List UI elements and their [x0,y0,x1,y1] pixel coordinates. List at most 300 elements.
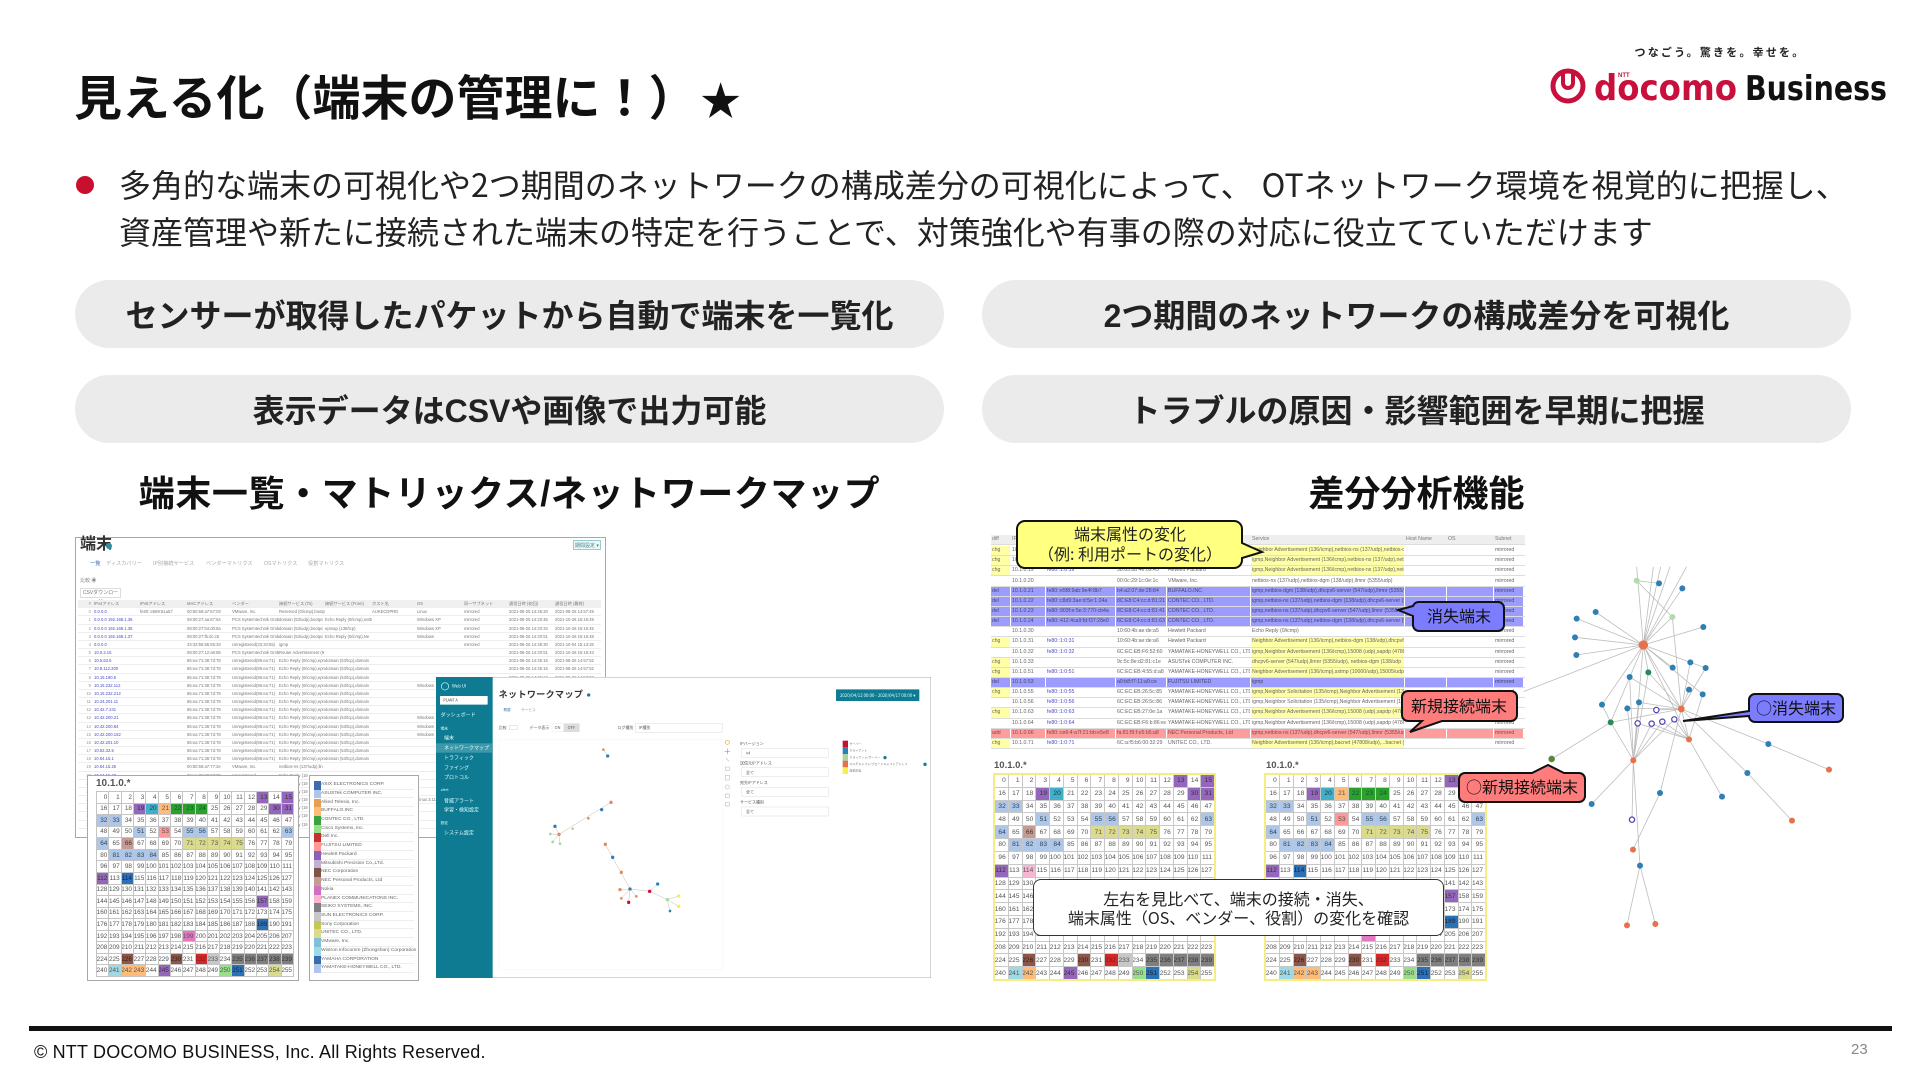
table: diff results: Host Name [1406,536,1432,542]
panel: device list screenshot: # [89,601,91,606]
chart: diff matrix before: 144 [995,893,1006,900]
chart: diff matrix before: 114 [1023,867,1033,874]
panel: vendor legend: ASUSTek COMPUTER INC. [321,791,382,796]
chart: diff matrix after: 212 [1321,944,1332,951]
map filter selects: 全て [746,769,754,776]
chart: diff matrix before: 96 [998,854,1006,861]
panel: device list screenshot: 24 [86,805,91,810]
chart: diff matrix before: 107 [1146,854,1157,861]
panel: device list screenshot: 7 [89,666,91,671]
chart: diff matrix before: 64 [998,829,1006,836]
chart: diff matrix before: 24 [1108,790,1116,797]
chart: diff matrix after: 165 [1335,906,1346,913]
panel: device list screenshot: 0.0.0.0 192.168.1.36 [94,617,132,622]
chart: IP address matrix: 110 [270,863,280,870]
chart: diff matrix after: 228 [1321,957,1332,964]
panel: vendor legend: UNITEC CO., LTD. [321,930,362,935]
panel: device list screenshot: Echo Reply (19 [279,772,308,778]
table: diff results: 6C:EC:EB:4:55:d:a8 [1117,669,1164,675]
chart: diff matrix after: 52 [1324,816,1332,823]
chart: diff matrix before: 6 [1085,777,1088,784]
chart: diff matrix after: 161 [1280,906,1290,913]
chart: diff matrix after: 0 [1273,777,1277,784]
chart: diff matrix after: 158 [1458,893,1469,900]
chart: diff matrix after: 77 [1448,829,1456,836]
chart: diff matrix after: 34 [1297,803,1304,810]
chart: diff matrix after: 225 [1280,957,1290,964]
panel: device list screenshot: 8 [89,674,91,680]
footer copyright: © NTT DOCOMO BUSINESS, Inc. All Rights Reserved. [34,1042,486,1062]
chart: diff matrix before: 177 [1009,918,1020,925]
panel: vendor legend: VMware, Inc. [321,939,350,944]
chart: diff matrix before: 20 [1053,790,1061,797]
chart: diff matrix before: 141 [1174,880,1184,887]
chart: diff matrix before: 117 [1064,867,1074,874]
panel: device list screenshot: Echo Reply (0/icmp),Ne [325,634,369,639]
chart: IP address matrix: 95 [285,852,292,859]
chart: diff matrix after: 113 [1280,867,1290,874]
chart: IP address matrix: 78 [273,840,280,847]
chart: diff matrix before: 189 [1174,918,1184,925]
chart: diff matrix before: 237 [1174,957,1184,964]
chart: diff matrix after: 136 [1376,880,1387,887]
chart: diff matrix after: 14 [1462,777,1469,784]
chart: IP address matrix: 87 [186,852,194,859]
map legend: 自動割当 [849,768,861,773]
chart: diff matrix before: 50 [1026,816,1033,823]
chart: diff matrix after: 91 [1421,841,1428,848]
chart: diff matrix after: 180 [1321,918,1332,925]
table: diff results: mirrored [1495,648,1514,654]
chart: diff matrix before: 157 [1174,893,1184,900]
chart: diff matrix after: 171 [1417,906,1428,913]
chart: diff matrix after: 24 [1379,790,1387,797]
sidebar: 学習・検知設定 [444,807,479,814]
chart: diff matrix before: 8 [1112,777,1116,784]
chart: diff matrix before: 98 [1026,854,1033,861]
chart: diff matrix before: 21 [1067,790,1074,797]
chart: diff matrix after: 141 [1445,880,1456,887]
panel: vendor legend: CONTEC CO., LTD. [321,817,365,822]
chart: diff matrix after: 6 [1356,777,1359,784]
panel: device list screenshot: 一覧 [90,561,100,567]
panel: device list screenshot: 0.0.0.0 192.168.1.35 [94,626,132,630]
chart: IP address matrix: 91 [236,852,243,859]
chart: diff matrix after: 32 [1269,803,1277,810]
chart: diff matrix before: 209 [1009,944,1020,951]
table: diff results: fe80::412:4ca9:fd:f37:28e0 [1047,618,1109,624]
panel: device list screenshot: CSVダウンロード [83,590,118,605]
panel: device list screenshot: ベンダーマトリクス [206,561,253,567]
chart: diff matrix after: 187 [1417,918,1428,925]
chart: diff matrix after: 191 [1472,918,1483,925]
chart: diff matrix before: 176 [995,918,1006,925]
chart: diff matrix before: 197 [1064,931,1074,938]
chart: IP address matrix: 26 [223,805,230,812]
table: diff results: 10.1.0.22 [1012,598,1034,604]
panel: device list screenshot: 10.15.190.5 [94,674,116,680]
chart: IP address matrix: 42 [223,817,230,824]
chart: diff matrix before: 48 [998,816,1006,823]
panel: device list screenshot: 10.42.201.10 [94,740,118,745]
table: diff results: 6C:a:f5:b6:00:32:29 [1117,740,1163,746]
table: diff results: Subnet [1495,536,1511,542]
panel: device list screenshot: mirrored [464,617,480,622]
panel: device list screenshot: 2021-08-25 14:57:52 [555,658,594,663]
chart: diff matrix after: 80 [1269,841,1277,848]
chart: diff matrix after: 206 [1458,931,1469,938]
chart: diff matrix after: 217 [1390,944,1400,951]
panel: device list screenshot: 10.64.15.28 [94,781,116,786]
chart: diff matrix after: 245 [1335,970,1346,977]
panel: device list screenshot: Echo Reply (19 [279,781,308,786]
chart: diff matrix after: 244 [1321,970,1332,977]
table: diff results: chg [992,567,1000,573]
chart: diff matrix before: 41 [1122,803,1130,810]
chart: diff matrix before: 78 [1191,829,1198,836]
chart: diff matrix after: 26 [1407,790,1414,797]
chart: diff matrix after: 243 [1307,970,1318,977]
table: diff results: fe80::903f:e:5e:3:770:cb4a [1047,608,1109,614]
chart: diff matrix before: 188 [1160,918,1171,925]
map filter selects: 全て [746,808,754,815]
sidebar: 端末 [444,734,454,741]
panel: device list screenshot: 86:ea:71:38:7d:78 [187,781,221,786]
chart: network graph [1523,566,1832,928]
chart: IP address matrix: 29 [260,805,267,812]
panel: device list screenshot: 86:ea:71:38:7d:78 [187,772,221,778]
panel: device list screenshot: 2021-10-26 16:16:43 [555,650,594,655]
chart: diff matrix before: 30 [1191,790,1198,797]
table: diff results: Hewlett Packard [1168,628,1206,634]
chart: diff matrix after: 179 [1307,918,1318,925]
chart: diff matrix before: 35 [1040,803,1047,810]
chart: diff matrix after: 33 [1283,803,1290,810]
chart: diff matrix after: 60 [1434,816,1442,823]
panel: device list screenshot: 86:ea:71:38:7d:78 [187,797,221,802]
chart: diff matrix before: 162 [1022,906,1033,913]
chart: diff matrix before: 14 [1191,777,1198,784]
map heading and filters: 2020/04/12 00:00 - 2020/04/17 00:00 ▾ [840,693,915,699]
table: diff results: 10.1.0.19 [1012,567,1034,573]
table: diff results: mirrored [1495,659,1514,665]
chart: diff matrix after: 227 [1307,957,1318,964]
table: diff results: fe80::1:0:71 [1047,740,1074,746]
chart: diff matrix after: 253 [1445,970,1456,977]
panel: device list screenshot: ディスカバリー [106,561,142,567]
sidebar: Web UI [452,683,466,690]
sidebar: プロトコル [444,774,469,781]
map legend: クライアント/サーバー [849,754,880,759]
chart: diff matrix after: 23 [1366,790,1373,797]
panel: device list screenshot: 86:ea:71:38:7d:78 [187,805,221,810]
chart: diff matrix before: 165 [1064,906,1074,913]
chart: diff matrix after: 249 [1390,970,1400,977]
panel: device list screenshot: domain (53/tcp),domain [325,666,369,671]
chart: diff matrix after: 78 [1462,829,1469,836]
chart: diff matrix after: 135 [1362,880,1373,887]
table: diff results: fe80::1:0:55 [1047,689,1074,695]
table: diff results: mirrored [1495,578,1514,584]
chart: IP address matrix: 60 [248,828,255,835]
chart: diff matrix after: 248 [1376,970,1387,977]
chart: diff matrix before: 56 [1108,816,1116,823]
panel: device list screenshot: 86:ea:71:38:7d:78 [187,674,221,680]
sidebar: システム設定 [444,830,474,837]
panel: device list screenshot: Unregistered(86:ea:71) [232,691,275,696]
panel: device list screenshot: 2021-08-25 14:20:51 [509,634,548,639]
panel: device list screenshot: 11 [87,699,91,704]
chart: IP address matrix: 30 [273,805,280,812]
chart: diff matrix before: 229 [1064,957,1074,964]
chart: diff matrix after: 159 [1472,893,1483,900]
chart: diff matrix before: 148 [1050,893,1061,900]
panel: device list screenshot: 比較 ◉ [80,578,96,584]
sidebar: 脅威アラート [444,797,474,804]
chart: diff matrix before: 119 [1091,867,1102,874]
chart: diff matrix before: 74 [1136,829,1143,836]
chart: diff matrix before: 149 [1064,893,1074,900]
panel: device list screenshot: domain (53/tcp),domain [325,756,369,761]
chart: diff matrix after: 130 [1294,880,1304,887]
chart: diff matrix after: 251 [1417,970,1428,977]
chart: diff matrix before: 111 [1202,854,1212,861]
table: diff results: OS [1448,536,1456,542]
chart: diff matrix after: 18 [1297,790,1304,797]
table: diff results: 10:60:4b:ae:de:a6 [1117,638,1159,644]
chart: diff matrix after: 57 [1393,816,1400,823]
chart: diff matrix after: 107 [1417,854,1428,861]
panel: device list screenshot: mirrored [464,634,480,639]
chart: diff matrix after: 188 [1431,918,1442,925]
table: diff results: 10.1.0.15 [1012,557,1034,563]
chart: IP address matrix [96,791,294,977]
panel: device list screenshot: Windows [417,715,434,720]
chart: diff matrix before: 23 [1095,790,1102,797]
panel: device list screenshot: IPv6アドレス [140,601,165,606]
table: diff results: fe80::c8d9:3ae:d:5e:1:24a [1047,598,1107,604]
chart: diff matrix after: 252 [1431,970,1442,977]
table: diff results: 10.1.0.64 [1012,720,1034,726]
pill: troubleshooting: トラブルの原因・影響範囲を早期に把握 [1128,393,1704,429]
chart: IP address matrix: 89 [211,852,218,859]
chart: diff matrix before: 222 [1188,944,1198,951]
panel: device list screenshot: Unregistered [232,772,256,778]
panel: device list screenshot: Unregistered(86:ea:71) [232,732,275,737]
panel: device list screenshot: Windows [417,634,434,639]
chart: IP address matrix: 14 [273,794,280,801]
panel: device list screenshot: VMware, Inc. [232,764,256,769]
panel: device list screenshot: domain (53/tcp),domain [325,740,369,745]
chart: diff matrix after: 106 [1404,854,1414,861]
chart: diff matrix before: 122 [1132,867,1143,874]
sidebar: ダッシュボード [441,712,476,719]
chart: diff matrix before: 61 [1177,816,1184,823]
panel: device list screenshot: 86:ea:71:38:7d:78 [187,740,221,745]
panel: device list screenshot: 2021-08-25 14:20:51 [509,650,548,655]
panel: device list screenshot: 2021-08-25 14:48:30 [509,642,548,647]
sidebar: PLANT A [443,698,459,703]
chart: IP address matrix: 94 [273,852,280,859]
chart: IP address matrix: 21 [162,805,169,812]
panel: device list screenshot: 通信日時 (最終) [555,601,584,606]
chart: diff matrix before: 146 [1022,893,1033,900]
chart: diff matrix after: 82 [1297,841,1304,848]
chart: diff matrix after: 114 [1294,867,1304,874]
panel: device list screenshot: epmap (135/tcp) [325,626,356,630]
chart: diff matrix before: 9 [1126,777,1130,784]
chart: IP address matrix: 71 [186,840,194,847]
chart: IP address matrix: 33 [113,817,120,824]
panel: vendor legend: NEC Personal Products, Ltd [321,878,382,883]
chart: diff matrix after: 29 [1448,790,1456,797]
map legend: マルチキャスト/ブロードキャストアドレス [849,761,908,766]
table: diff results: add [992,730,1001,736]
chart: diff matrix before: 59 [1150,816,1157,823]
chart: diff matrix before: 66 [1026,829,1033,836]
chart: diff matrix before: 100 [1050,854,1061,861]
chart: diff matrix before: 218 [1132,944,1143,951]
label: right diff matrix: 10.1.0.* [1266,760,1299,771]
panel: device list screenshot: 期間設定 ▾ [575,543,599,549]
panel: device list screenshot [75,535,606,838]
panel: device list screenshot: 10.15.232.212 [94,691,121,696]
chart: IP address matrix: 19 [137,805,144,812]
panel: device list screenshot: 3 [89,634,91,639]
map heading and filters [499,687,919,732]
chart: diff matrix before: 145 [1009,893,1020,900]
panel: device list screenshot: 2021-08-25 14:20:34 [509,626,548,630]
chart: diff matrix before: 54 [1081,816,1088,823]
chart: diff matrix after: 90 [1407,841,1414,848]
chart: diff matrix after: 178 [1294,918,1304,925]
map heading and filters: 比較 [499,724,507,731]
callout: device attribute change: 端末属性の変化 [1074,521,1186,545]
chart: diff matrix before: 110 [1188,854,1198,861]
chart: diff matrix before: 127 [1201,867,1212,874]
chart: IP address matrix: 32 [100,817,107,824]
panel: vendor legend: Wistron Infocomm (Zhongshan) Corporation [321,948,416,953]
chart: diff matrix after: 1 [1287,777,1290,784]
chart: diff matrix before: 161 [1009,906,1020,913]
table: diff results: fe80::1:0:31 [1047,638,1074,644]
panel: device list screenshot: 10.24.201.11 [94,699,118,704]
panel: device list screenshot: 2021-10-26 16:16:49 [555,617,594,622]
chart: IP address matrix: 116 [146,875,157,882]
panel: network map screenshot [436,677,931,978]
chart: diff matrix after: 169 [1390,906,1400,913]
chart: diff matrix before [993,773,1216,981]
panel: device list screenshot: domain (53/tcp),domain [325,699,369,704]
chart: diff matrix before: 25 [1122,790,1130,797]
chart: diff matrix after: 155 [1417,893,1428,900]
chart: diff matrix before: 221 [1174,944,1184,951]
chart: diff matrix before: 72 [1108,829,1116,836]
callout: device attribute change: （例: 利用ポートの変化） [1038,541,1222,565]
chart: IP address matrix: 16 [100,805,107,812]
chart: diff matrix before: 160 [995,906,1006,913]
chart: diff matrix after: 149 [1335,893,1346,900]
table: diff results: 6C:EC:EB:26:5c:85 [1117,689,1162,695]
panel: device list screenshot: 10.64.15.30 [94,797,116,802]
callout: disappeared device circle legend [1682,693,1844,723]
panel: device list screenshot: domain (53/tcp),domain [325,683,369,688]
sidebar: ネットワークマップ [444,744,489,751]
chart: diff matrix after: 96 [1269,854,1277,861]
chart: diff matrix before: 143 [1201,880,1212,887]
chart: diff matrix before: 19 [1040,790,1047,797]
chart: diff matrix after: 27 [1421,790,1428,797]
chart: IP address matrix: 39 [186,817,194,824]
title: 見える化（端末の管理に！）★ [74,73,741,126]
chart: IP address matrix: 73 [211,840,218,847]
chart: IP address matrix: 72 [199,840,206,847]
chart: diff matrix after: 43 [1421,803,1428,810]
chart: diff matrix before: 13 [1177,777,1184,784]
chart: IP address matrix: 24 [199,805,206,812]
chart: diff matrix after: 190 [1458,918,1469,925]
chart: IP address matrix: 8 [202,794,206,801]
panel: device list screenshot: 86:ea:71:38:7d:78 [187,822,221,826]
chart: diff matrix before: 219 [1146,944,1157,951]
chart: IP address matrix: 2 [128,794,132,801]
panel: vendor legend: NEC Corporation [321,869,358,874]
panel: device list screenshot: Echo Reply (19 [279,789,308,794]
chart: diff matrix before: 183 [1091,918,1102,925]
panel: device list screenshot: 08:00:27:b4:d0:8a [187,626,221,630]
chart: diff matrix after: 95 [1476,841,1483,848]
pill: auto list [75,280,944,348]
panel: vendor legend: Allied Telesis, Inc. [321,800,360,804]
panel: device list screenshot: Unregistered(86:ea:71) [232,666,275,671]
chart: diff matrix after: 201 [1390,931,1400,938]
chart: diff matrix before: 210 [1022,944,1033,951]
chart: diff matrix after: 163 [1307,906,1318,913]
chart: diff matrix before: 134 [1078,880,1088,887]
chart: diff matrix after: 87 [1366,841,1373,848]
chart: diff matrix before: 238 [1188,957,1198,964]
panel: device list screenshot: Windows [417,683,434,688]
chart: diff matrix before: 83 [1040,841,1047,848]
callout: compare left and right: 左右を見比べて、端末の接続・消失、 [1103,886,1374,910]
chart: IP address matrix: 76 [248,840,255,847]
panel: device list screenshot: 86:ea:71:38:7d:78 [187,756,221,761]
table: diff results [991,535,1525,749]
chart: diff matrix after: 100 [1321,854,1332,861]
panel: device list screenshot: Echo Reply (19 [279,822,308,826]
table: diff results: fe80::1:0:15 [1047,557,1074,563]
table: diff results: chg [992,709,1000,715]
table: diff results: 10.1.0.71 [1012,740,1034,746]
panel: device list screenshot: 10.5.63.5 [94,658,111,663]
panel: device list screenshot: 86:ea:71:38:7d:78 [187,748,221,753]
chart: diff matrix before: 211 [1036,944,1047,951]
chart: diff matrix after: 15 [1476,777,1483,784]
chart: diff matrix after: 182 [1348,918,1359,925]
panel: device list screenshot: Unregistered [232,822,256,826]
table: diff results: 00:0c:29:1c:0e:1c [1117,578,1158,584]
chart: diff matrix before: 253 [1174,970,1184,977]
chart: diff matrix after: 205 [1445,931,1456,938]
chart: diff matrix after: 46 [1462,803,1469,810]
chart: diff matrix after: 255 [1472,970,1483,977]
table: diff results: 10:60:4b:ae:de:a5 [1117,628,1159,634]
panel: vendor legend [309,775,419,981]
chart: diff matrix before: 51 [1040,816,1047,823]
chart: IP address matrix: 61 [260,828,267,835]
chart: diff matrix before: 67 [1040,829,1047,836]
panel: device list screenshot: 00:50:56:a7:77:2e [187,764,221,769]
